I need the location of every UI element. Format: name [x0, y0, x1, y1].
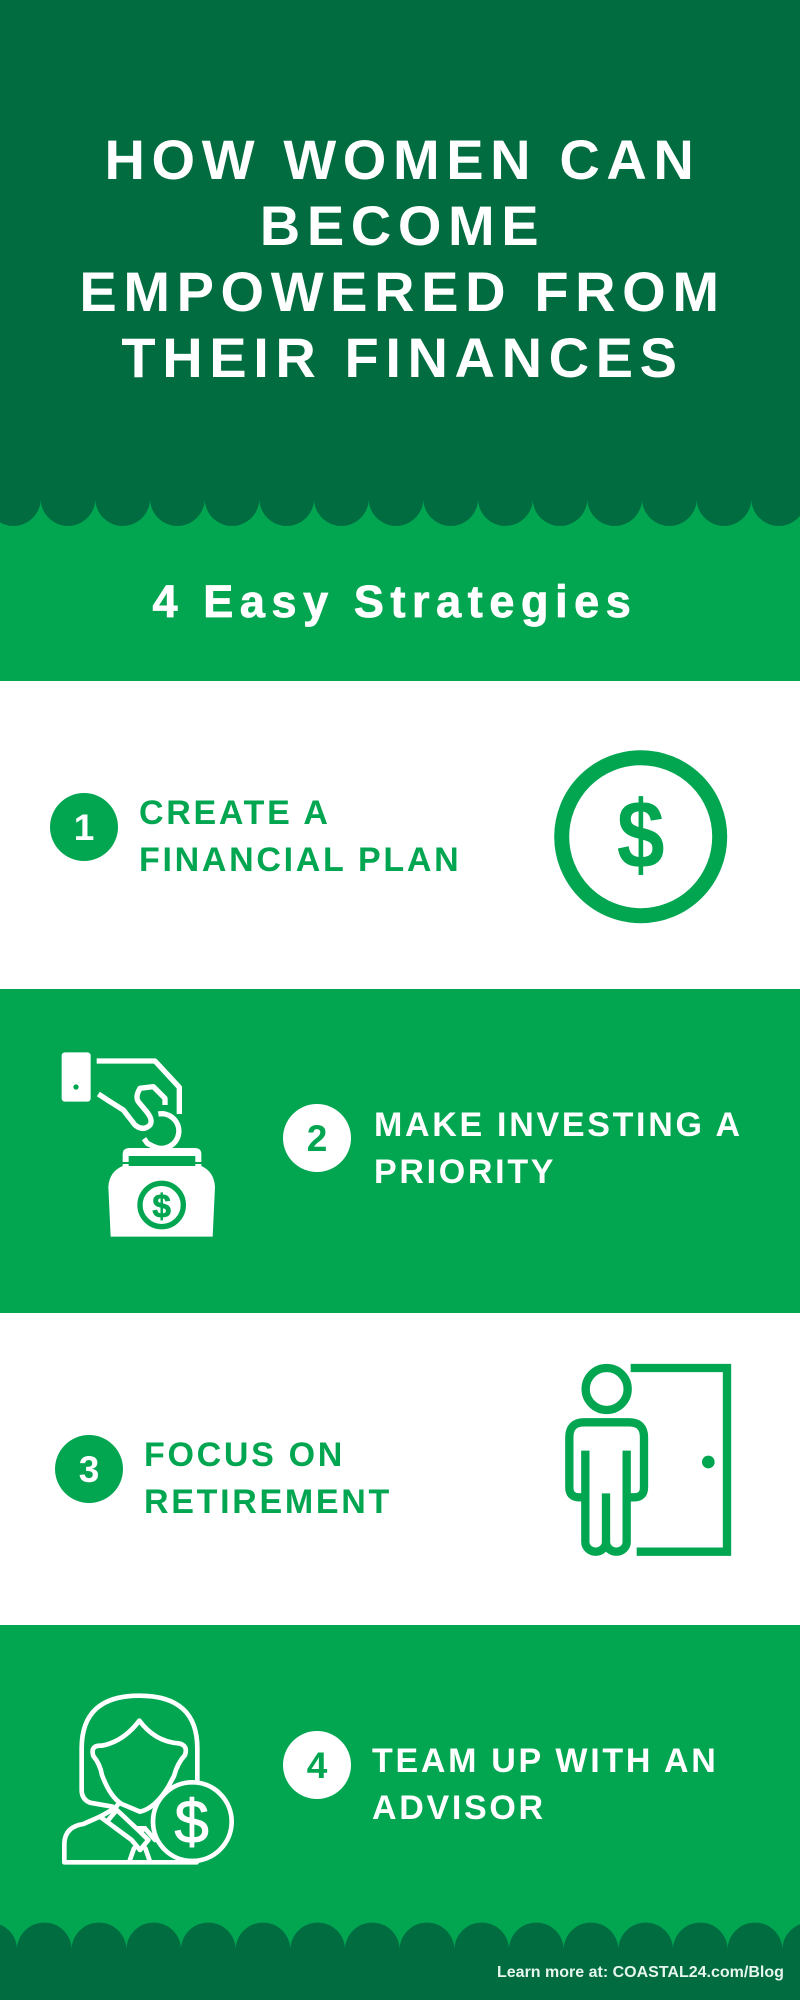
heading 3: FOCUS ON [144, 1436, 345, 1474]
icon: dollar coin: $ [617, 781, 665, 889]
panel: footer [0, 1923, 800, 2000]
heading 1 [139, 794, 461, 879]
badge 4: 4 [307, 1745, 328, 1786]
badge 4 [283, 1731, 351, 1799]
heading 2: MAKE INVESTING A [374, 1106, 743, 1144]
badge 2: 2 [307, 1118, 327, 1159]
heading 1: FINANCIAL PLAN [139, 841, 461, 879]
heading 4: ADVISOR [372, 1789, 546, 1827]
heading 4: TEAM UP WITH AN [372, 1742, 718, 1780]
heading 2 [374, 1106, 743, 1191]
icon: dollar coin [562, 758, 720, 916]
title: BECOME [260, 194, 545, 257]
badge 1: 1 [74, 807, 94, 848]
heading 2: PRIORITY [374, 1153, 556, 1191]
heading 3 [144, 1436, 392, 1521]
icon: hand dropping coin into jar [62, 1052, 215, 1237]
footer text: Learn more at: COASTAL24.com/Blog [497, 1964, 784, 1981]
panel: subtitle band [0, 498, 800, 681]
panel: strategy 2 [0, 989, 800, 1313]
heading 4 [372, 1742, 718, 1827]
subtitle: 4 Easy Strategies [152, 576, 637, 627]
icon: advisor with coin: $ [175, 1788, 209, 1857]
title: THEIR FINANCES [121, 326, 684, 389]
title: HOW WOMEN CAN [105, 128, 700, 191]
panel: header [0, 0, 800, 526]
icon: hand dropping coin into jar: $ [152, 1188, 171, 1225]
heading 3: RETIREMENT [144, 1483, 392, 1521]
icon: advisor with coin [64, 1696, 232, 1862]
badge 1 [50, 793, 118, 861]
panel: strategy 1 [0, 681, 800, 989]
title [79, 128, 726, 389]
badge 3: 3 [79, 1449, 99, 1490]
panel: strategy 3 [0, 1313, 800, 1625]
heading 1: CREATE A [139, 794, 331, 832]
badge 3 [55, 1435, 123, 1503]
title: EMPOWERED FROM [79, 260, 726, 323]
icon: person by door [569, 1368, 727, 1552]
panel: strategy 4 [0, 1625, 800, 1955]
badge 2 [283, 1104, 351, 1172]
